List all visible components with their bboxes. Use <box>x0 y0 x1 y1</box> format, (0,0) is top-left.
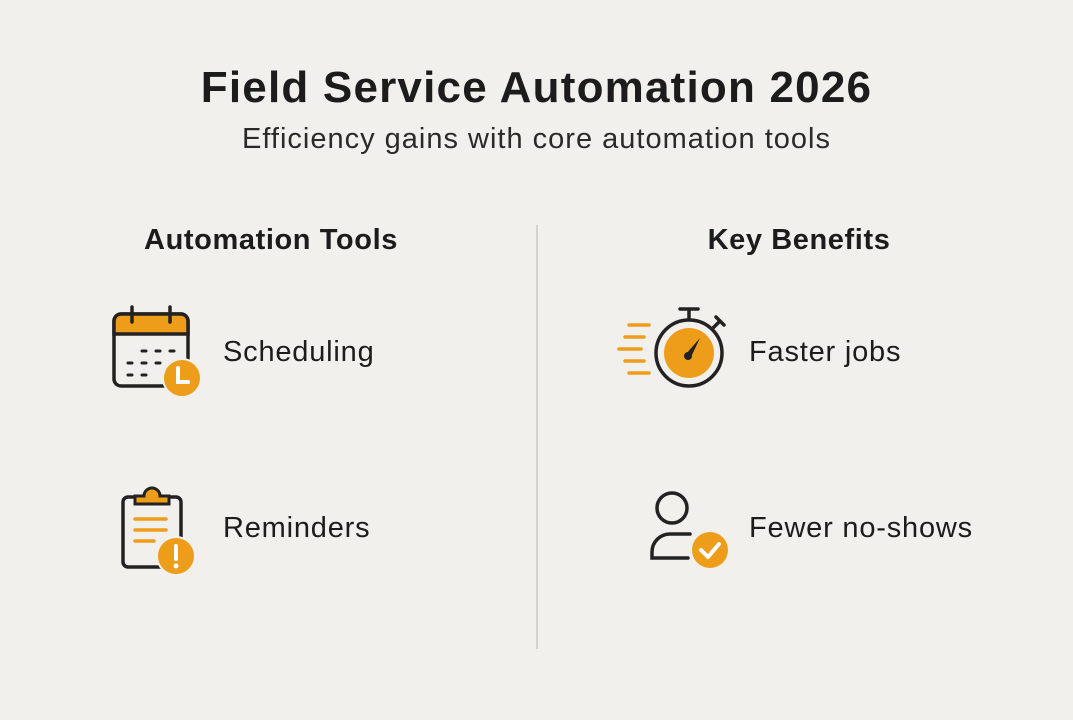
icon: clipboard alert <box>121 486 194 574</box>
icon: calendar with clock <box>112 305 200 396</box>
heading: key benefits: Key Benefits <box>708 224 890 256</box>
label: faster jobs: Faster jobs <box>749 336 901 368</box>
icon: stopwatch <box>617 307 726 388</box>
title: Field Service Automation 2026 <box>201 63 872 112</box>
label: fewer no-shows: Fewer no-shows <box>749 512 973 544</box>
icon: person check <box>650 491 728 568</box>
label: reminders: Reminders <box>223 512 370 544</box>
label: scheduling: Scheduling <box>223 336 374 368</box>
heading: automation tools: Automation Tools <box>144 224 398 256</box>
subtitle: Efficiency gains with core automation tools <box>242 123 831 155</box>
